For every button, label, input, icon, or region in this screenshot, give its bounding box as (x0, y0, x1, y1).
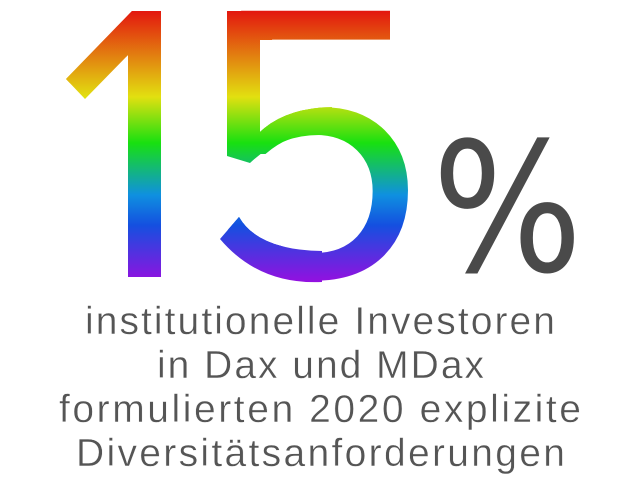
caption line 3: formulierten 2020 explizite (59, 388, 581, 431)
digit 5 (220, 10, 408, 282)
caption text block (59, 300, 581, 475)
caption line 4: Diversitätsanforderungen (76, 432, 565, 475)
big number 15 with rainbow gradient (66, 10, 408, 282)
percent sign: % (432, 104, 583, 313)
caption line 2: in Dax und MDax (157, 344, 484, 387)
caption line 1: institutionelle Investoren (85, 300, 555, 343)
